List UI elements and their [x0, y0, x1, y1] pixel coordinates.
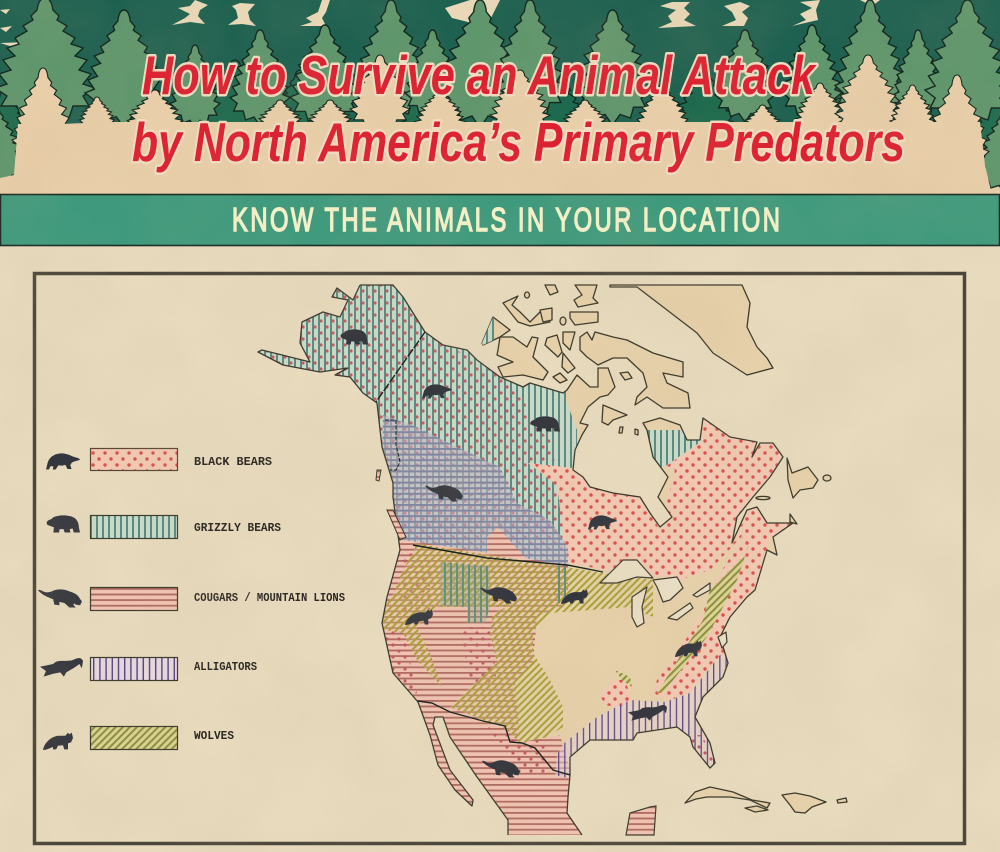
banner: know the animals	[0, 194, 1000, 246]
banner: know the animals: KNOW THE ANIMALS IN YOUR LOCATION	[232, 202, 780, 239]
icon: grizzly bear in alaska	[340, 329, 368, 344]
yucatan	[626, 806, 656, 835]
black bear range east	[528, 410, 800, 580]
map frame	[34, 274, 964, 844]
icon: grizzly bear in nunavut	[530, 416, 560, 432]
legend row: black bears	[46, 448, 272, 470]
icon: cougar in british columbia	[425, 485, 463, 502]
legend row: grizzly bears	[47, 515, 281, 538]
greenland and arctic islands	[480, 285, 773, 435]
legend row: grizzly bears: GRIZZLY BEARS	[194, 521, 281, 535]
alligator range	[555, 655, 730, 780]
black bear range over grizzly	[250, 280, 568, 565]
legend row: cougars	[38, 588, 345, 610]
title: How to Survive an Animal Attack	[142, 44, 817, 106]
wolf range appalachia	[657, 535, 752, 693]
legend row: alligators: ALLIGATORS	[194, 660, 257, 674]
great lakes	[600, 560, 727, 648]
legend row: alligators	[40, 658, 257, 680]
map of North America	[250, 280, 847, 840]
mainland coastline	[258, 285, 793, 835]
icon: wolf in appalachia	[675, 641, 702, 657]
grizzly range	[259, 286, 577, 564]
habitat ranges clipped to mainland	[250, 280, 800, 840]
cougar range canada	[380, 415, 568, 570]
header forest illustration	[0, 0, 1000, 195]
icon: black bear in yukon	[422, 384, 452, 399]
title	[132, 44, 905, 173]
caribbean islands	[685, 787, 847, 813]
pacific islands	[376, 470, 406, 540]
legend row: cougars: COUGARS / MOUNTAIN LIONS	[194, 591, 345, 605]
icon: wolf in great lakes	[561, 590, 588, 604]
icon: wolf in oregon	[405, 610, 433, 625]
snow gaps between distant trees	[0, 0, 880, 46]
icon: black bear in ontario	[588, 515, 617, 530]
beige ground and front trees	[12, 55, 989, 184]
cougar range usa and mexico	[384, 540, 582, 835]
newfoundland and gulf islands	[756, 458, 831, 524]
icon: cougar in rockies	[480, 587, 517, 604]
icon: alligator in gulf states	[628, 705, 667, 721]
legend	[38, 448, 345, 750]
wolf range west	[384, 543, 568, 742]
mid-layer dark trees	[0, 60, 1000, 180]
black bear pockets in the west and south	[386, 631, 417, 694]
mainland outline fill	[258, 285, 793, 835]
legend row: wolves	[43, 726, 234, 750]
legend row: black bears: BLACK BEARS	[194, 455, 272, 469]
green trees	[0, 0, 1000, 193]
icon: cougar in mexico	[482, 760, 520, 777]
national borders	[376, 332, 603, 775]
grizzly pockets in the rockies	[440, 562, 490, 623]
legend row: wolves: WOLVES	[194, 729, 234, 743]
